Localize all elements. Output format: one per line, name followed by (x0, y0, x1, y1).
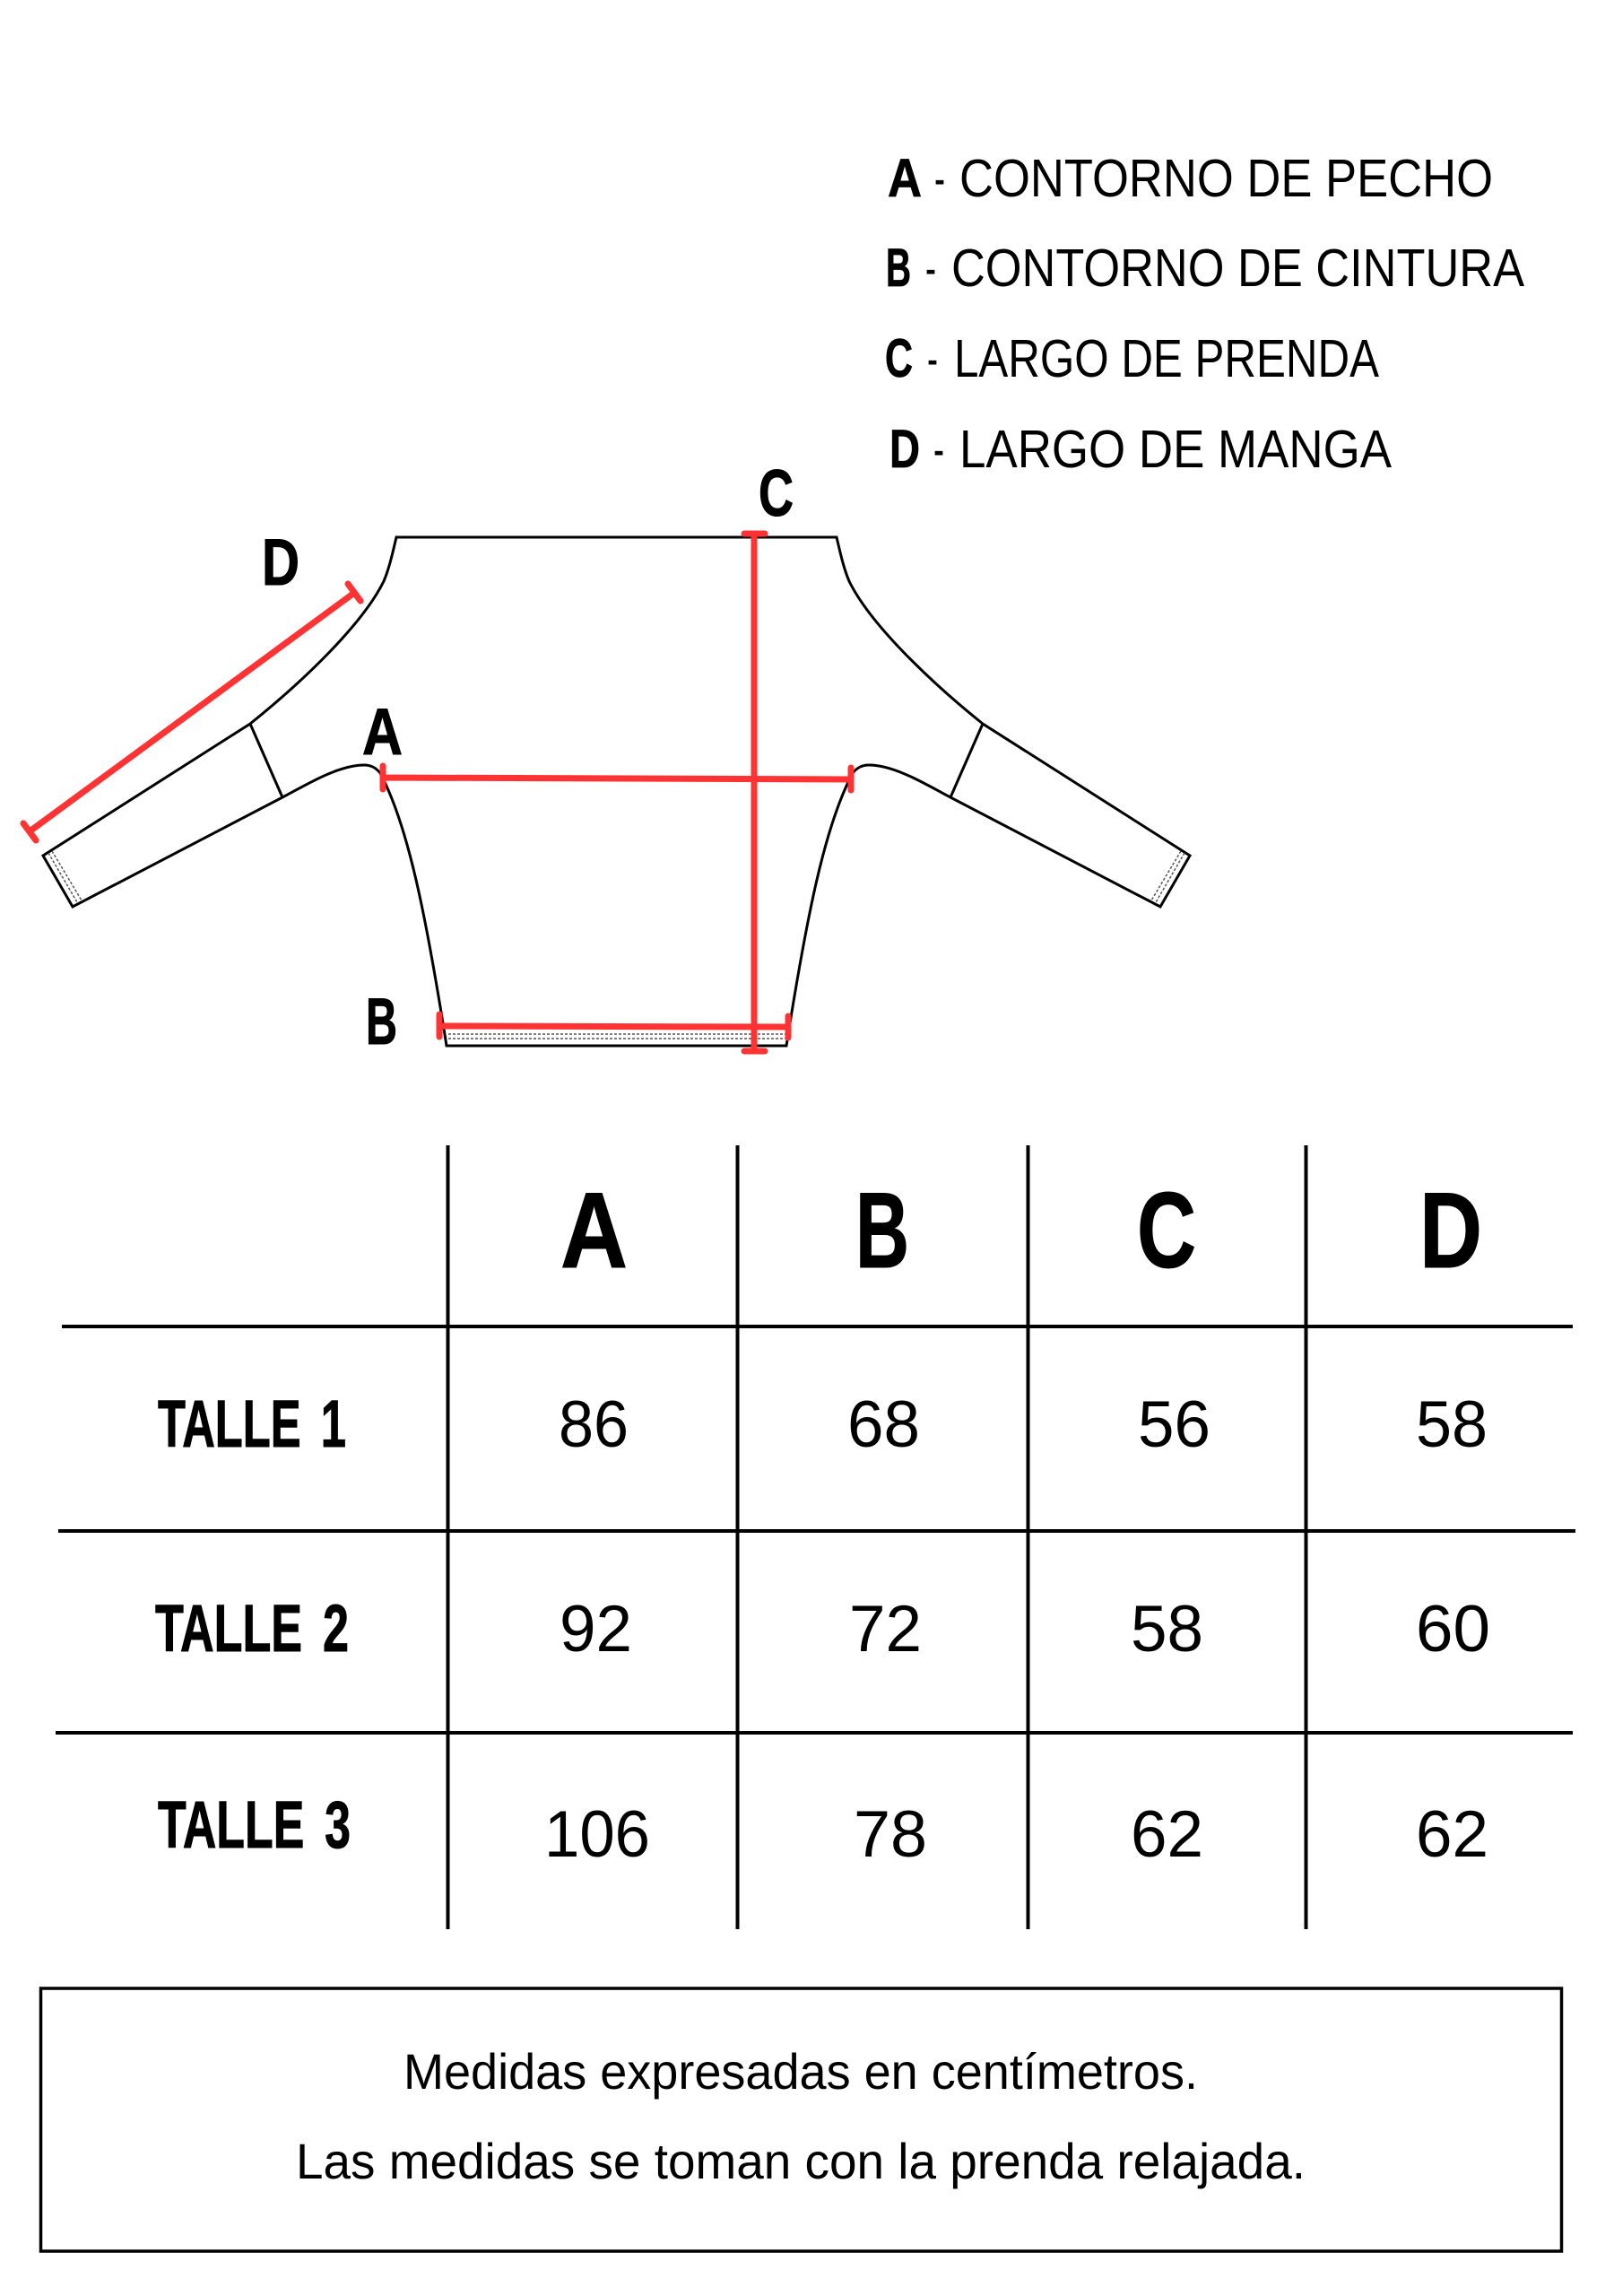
header row: A (560, 1170, 628, 1291)
note box (41, 1988, 1562, 2251)
row talle 3: 106 (544, 1798, 650, 1871)
header row: B (855, 1170, 909, 1291)
row talle 1: 58 (1416, 1388, 1488, 1461)
diagram label C: C (759, 457, 794, 530)
note line 2: Las medidas se toman con la prenda relajada. (296, 2133, 1306, 2189)
row talle 3: 78 (854, 1798, 927, 1871)
row talle 1: 86 (559, 1388, 629, 1461)
note line 1: Medidas expresadas en centímetros. (404, 2043, 1198, 2100)
row talle 2 (155, 1591, 1490, 1665)
row talle 1: TALLE 1 (158, 1387, 346, 1461)
diagram label D: D (262, 526, 299, 599)
measure line B (439, 1014, 788, 1038)
legend item C: LARGO DE PRENDA (954, 329, 1380, 388)
legend item A: A (888, 148, 922, 208)
legend item D: D (889, 419, 920, 479)
legend item A: CONTORNO DE PECHO (959, 149, 1493, 208)
note border (41, 1988, 1562, 2251)
legend item C: C (885, 328, 913, 388)
header row (560, 1170, 1482, 1291)
legend item A: - (934, 149, 945, 208)
row talle 3: 62 (1131, 1798, 1203, 1871)
table grid (56, 1145, 1575, 1929)
row talle 1: 68 (847, 1388, 920, 1461)
header row: C (1137, 1170, 1196, 1291)
cuff and hem stitching (48, 851, 1184, 1039)
row talle 1: 56 (1138, 1388, 1210, 1461)
row talle 2: 72 (849, 1593, 922, 1665)
legend item B: B (886, 238, 911, 298)
measure line A (383, 766, 851, 790)
row talle 3: TALLE 3 (158, 1787, 351, 1862)
row talle 3: 62 (1416, 1798, 1488, 1871)
legend item B: - (925, 239, 936, 298)
row talle 2: 60 (1416, 1593, 1490, 1665)
legend item D: - (933, 420, 944, 479)
measure line D (23, 584, 360, 840)
measure line C (744, 534, 765, 1051)
diagram label A: A (362, 696, 403, 769)
row talle 1 (158, 1387, 1488, 1461)
row talle 2: 58 (1131, 1593, 1203, 1665)
diagram label B: B (366, 986, 397, 1058)
garment diagram (23, 457, 1190, 1058)
legend: measurement key (885, 148, 1525, 479)
garment outline (43, 537, 1190, 1046)
legend item D: LARGO DE MANGA (959, 420, 1393, 479)
row talle 3 (158, 1787, 1488, 1871)
row talle 2: 92 (560, 1593, 632, 1665)
size table (56, 1145, 1575, 1929)
legend item B: CONTORNO DE CINTURA (951, 239, 1525, 298)
sleeve seams (250, 724, 983, 797)
header row: D (1419, 1170, 1482, 1291)
legend item C: - (927, 329, 938, 388)
row talle 2: TALLE 2 (155, 1591, 349, 1665)
